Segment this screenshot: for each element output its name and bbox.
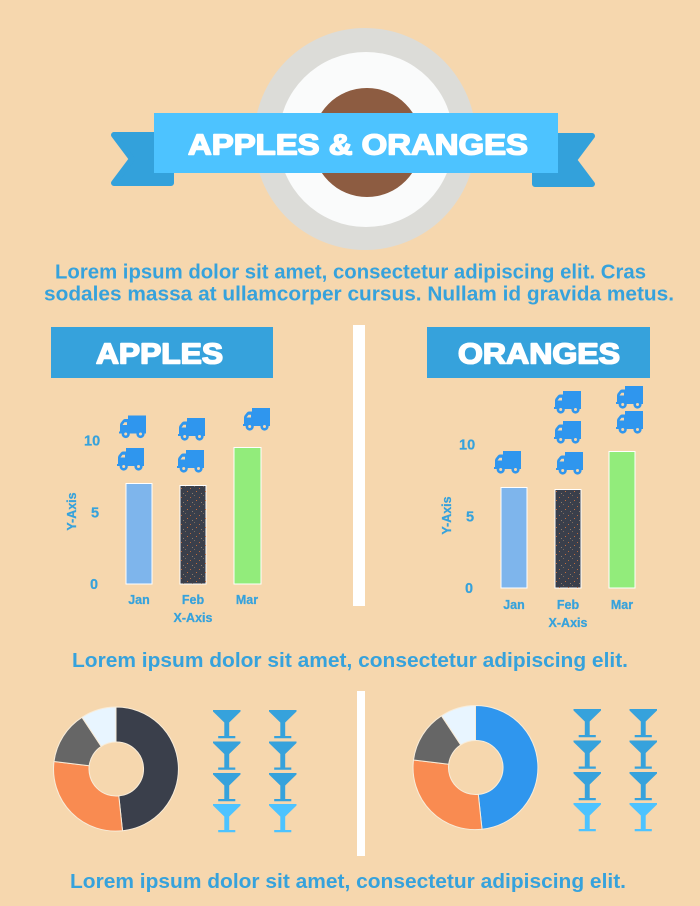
y axis labels: Y-Axis xyxy=(65,492,79,531)
header emblem with title ribbon xyxy=(114,28,592,250)
donut chart: apples xyxy=(54,707,178,831)
x axis labels: Mar xyxy=(611,598,633,612)
ribbon band xyxy=(154,113,558,173)
x axis labels xyxy=(128,593,258,625)
heading: oranges: ORANGES xyxy=(458,338,620,370)
y axis labels: Y-Axis xyxy=(440,496,454,535)
y axis labels xyxy=(65,434,100,593)
y axis labels: 10 xyxy=(84,434,100,450)
emblem circles xyxy=(254,28,476,250)
x axis labels xyxy=(503,598,633,630)
cocktail glass icons: oranges xyxy=(574,709,657,831)
x axis labels: X-Axis xyxy=(174,611,212,625)
y axis labels: 0 xyxy=(465,581,473,597)
intro text: sodales massa at ullamcorper cursus. Nullam id gravida metus. xyxy=(44,282,674,306)
donut chart: oranges xyxy=(413,705,538,830)
x axis labels: Feb xyxy=(557,598,579,612)
title: APPLES & ORANGES xyxy=(188,130,528,162)
heading: oranges xyxy=(427,327,650,378)
heading: apples xyxy=(51,327,273,378)
heading: apples: APPLES xyxy=(96,338,223,370)
truck icons xyxy=(117,408,270,471)
y axis labels: 5 xyxy=(91,506,99,522)
intro text xyxy=(44,260,674,306)
x axis labels: Feb xyxy=(182,593,204,607)
y axis labels: 0 xyxy=(90,577,98,593)
bar chart: apples xyxy=(65,408,270,625)
x axis labels: X-Axis xyxy=(549,616,587,630)
x axis labels: Jan xyxy=(503,598,525,612)
truck icons xyxy=(494,386,643,473)
y axis labels xyxy=(440,438,475,597)
intro text: Lorem ipsum dolor sit amet, consectetur adipiscing elit. Cras xyxy=(55,260,646,284)
cocktail glass icons: apples xyxy=(213,710,296,832)
x axis labels: Mar xyxy=(236,593,258,607)
bar chart: oranges xyxy=(440,386,643,630)
bars xyxy=(126,448,261,584)
y axis labels: 5 xyxy=(466,510,474,526)
y axis labels: 10 xyxy=(459,438,475,454)
mid caption: Lorem ipsum dolor sit amet, consectetur adipiscing elit. xyxy=(72,649,628,672)
bottom caption: Lorem ipsum dolor sit amet, consectetur adipiscing elit. xyxy=(70,870,626,893)
x axis labels: Jan xyxy=(128,593,150,607)
ribbon tails xyxy=(114,135,592,184)
bars xyxy=(501,452,635,588)
